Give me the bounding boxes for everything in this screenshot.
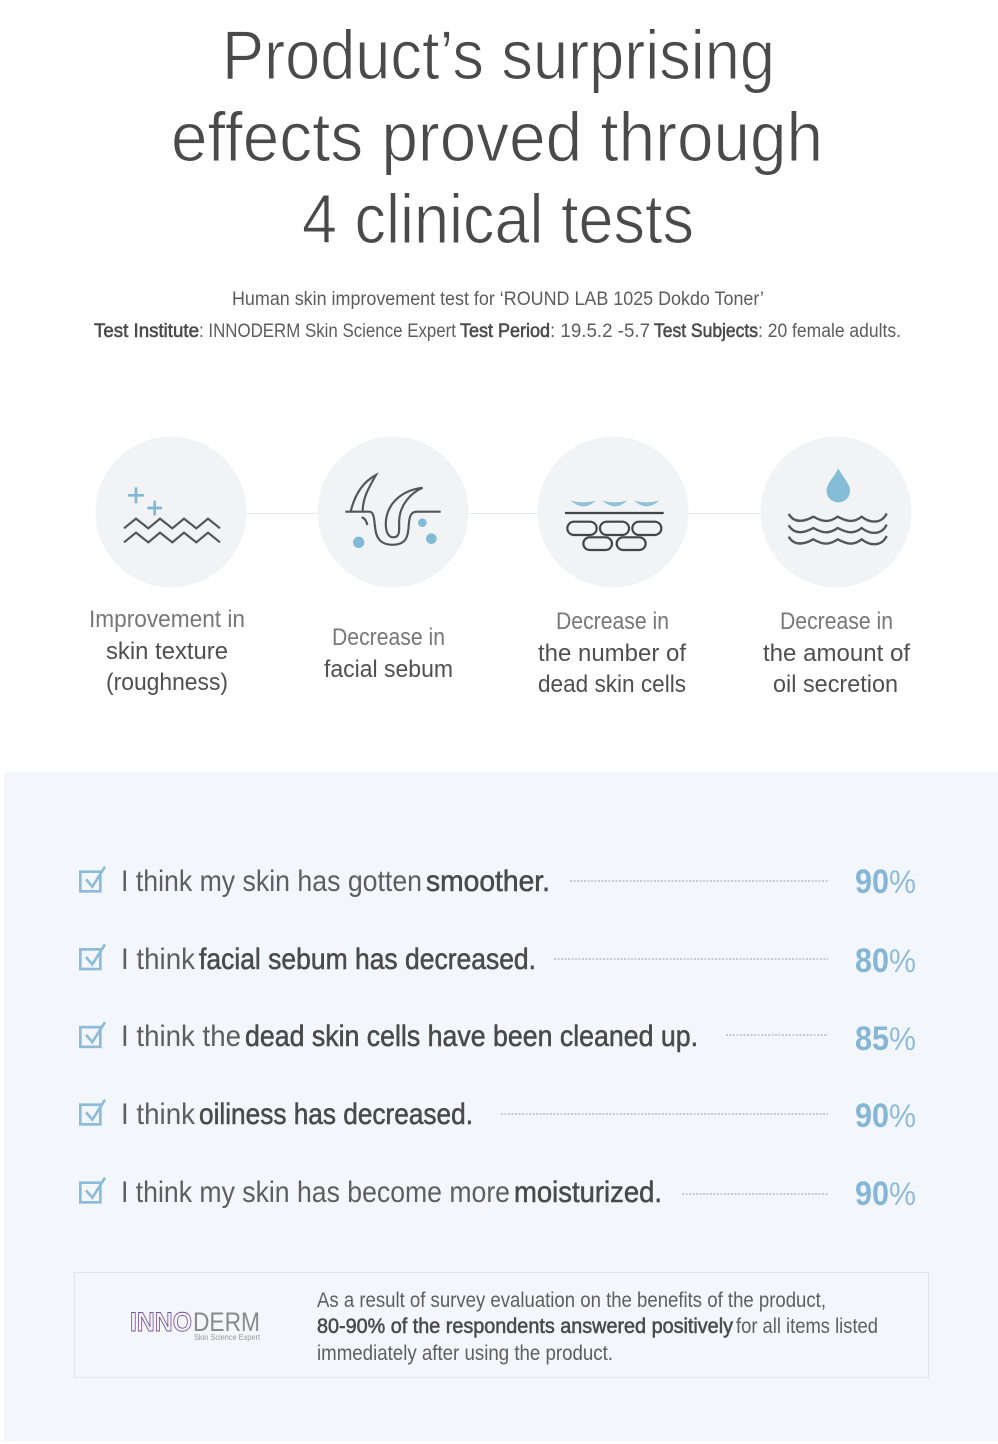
- survey row: moisturized 90%: [80, 1175, 916, 1213]
- logo: INNODERM: INNO: [130, 1307, 192, 1337]
- icon: hair follicle with sebum: [345, 475, 441, 548]
- label: skin texture: [106, 638, 228, 665]
- benefit: skin texture: [89, 436, 246, 696]
- conclusion text: [317, 1289, 878, 1365]
- survey row: dead skin cells 85%: %: [889, 1021, 916, 1057]
- logo: INNODERM: [130, 1307, 261, 1342]
- test details: : INNODERM Skin Science Expert: [199, 321, 457, 342]
- label: [89, 606, 245, 696]
- survey row: dead skin cells 85%: dead skin cells have been cleaned up.: [245, 1020, 698, 1053]
- icon: skin cells: [565, 501, 664, 550]
- test details: Test Period: [460, 321, 550, 342]
- label: oil secretion: [773, 671, 898, 698]
- survey row: smoother 90%: %: [889, 864, 916, 900]
- icon: plus signs and zigzag texture: [124, 487, 220, 542]
- conclusion text: As a result of survey evaluation on the benefits of the product,: [317, 1289, 826, 1312]
- benefit: facial sebum: [318, 436, 468, 683]
- icon: oil drop and waves: [789, 468, 887, 544]
- label: [324, 624, 453, 683]
- label: the amount of: [763, 640, 910, 667]
- label: [763, 608, 910, 698]
- label: Decrease in: [556, 608, 669, 635]
- label: Decrease in: [780, 608, 893, 635]
- title: [171, 16, 823, 258]
- label: [538, 608, 686, 698]
- label: (roughness): [106, 669, 228, 696]
- logo: INNODERM: DERM: [193, 1307, 260, 1337]
- test details: Human skin improvement test for ‘ROUND LAB 1025 Dokdo Toner’: [232, 289, 764, 310]
- survey row: smoother 90%: [80, 863, 916, 901]
- benefit: oil secretion: [760, 436, 912, 698]
- test details: Test Subjects: [654, 321, 758, 342]
- benefit: dead skin cells: [538, 436, 688, 698]
- icon: checkbox: [80, 1178, 105, 1202]
- test details: : 20 female adults.: [758, 321, 901, 342]
- conclusion box: [74, 1272, 928, 1378]
- icon: checkbox: [80, 1100, 105, 1124]
- test details: : 19.5.2 -5.7: [550, 321, 650, 342]
- survey row: smoother 90%: I think my skin has gotten: [121, 865, 422, 898]
- conclusion text: for all items listed: [736, 1315, 878, 1338]
- label: dead skin cells: [538, 671, 686, 698]
- icon: checkbox: [80, 867, 105, 891]
- title: effects proved through: [171, 98, 823, 176]
- survey row: facial sebum 80%: [80, 942, 916, 980]
- survey row: moisturized 90%: 90: [855, 1175, 889, 1213]
- survey row: moisturized 90%: %: [889, 1176, 916, 1212]
- survey row: oiliness 90%: I think: [121, 1098, 196, 1131]
- conclusion text: immediately after using the product.: [317, 1342, 613, 1365]
- survey row: dead skin cells 85%: 85: [855, 1020, 889, 1058]
- test details: [94, 289, 901, 342]
- survey row: facial sebum 80%: 80: [855, 942, 889, 980]
- test details: Test Institute: [94, 321, 199, 342]
- survey row: dead skin cells 85%: I think the: [121, 1020, 241, 1053]
- survey row: oiliness 90%: %: [889, 1098, 916, 1134]
- survey row: oiliness 90%: 90: [855, 1097, 889, 1135]
- label: the number of: [538, 640, 686, 667]
- title: 4 clinical tests: [302, 180, 694, 258]
- label: Improvement in: [89, 606, 245, 633]
- panel: survey results: [4, 772, 998, 1441]
- logo: INNODERM: Skin Science Expert: [194, 1333, 261, 1342]
- label: Decrease in: [332, 624, 445, 651]
- survey row: smoother 90%: 90: [855, 863, 889, 901]
- survey row: dead skin cells 85%: [80, 1020, 916, 1058]
- survey row: smoother 90%: smoother.: [426, 865, 550, 898]
- label: facial sebum: [324, 656, 453, 683]
- icon: checkbox: [80, 1022, 105, 1047]
- survey row: oiliness 90%: oiliness has decreased.: [199, 1098, 473, 1131]
- icon: checkbox: [80, 944, 105, 969]
- survey row: facial sebum 80%: I think: [121, 943, 196, 976]
- survey row: oiliness 90%: [80, 1097, 916, 1135]
- survey row: facial sebum 80%: %: [889, 943, 916, 979]
- conclusion text: 80-90% of the respondents answered positively: [317, 1315, 733, 1338]
- survey row: facial sebum 80%: facial sebum has decreased.: [199, 943, 536, 976]
- survey row: moisturized 90%: moisturized.: [514, 1176, 662, 1209]
- title: Product’s surprising: [222, 16, 775, 94]
- survey row: moisturized 90%: I think my skin has become more: [121, 1176, 510, 1209]
